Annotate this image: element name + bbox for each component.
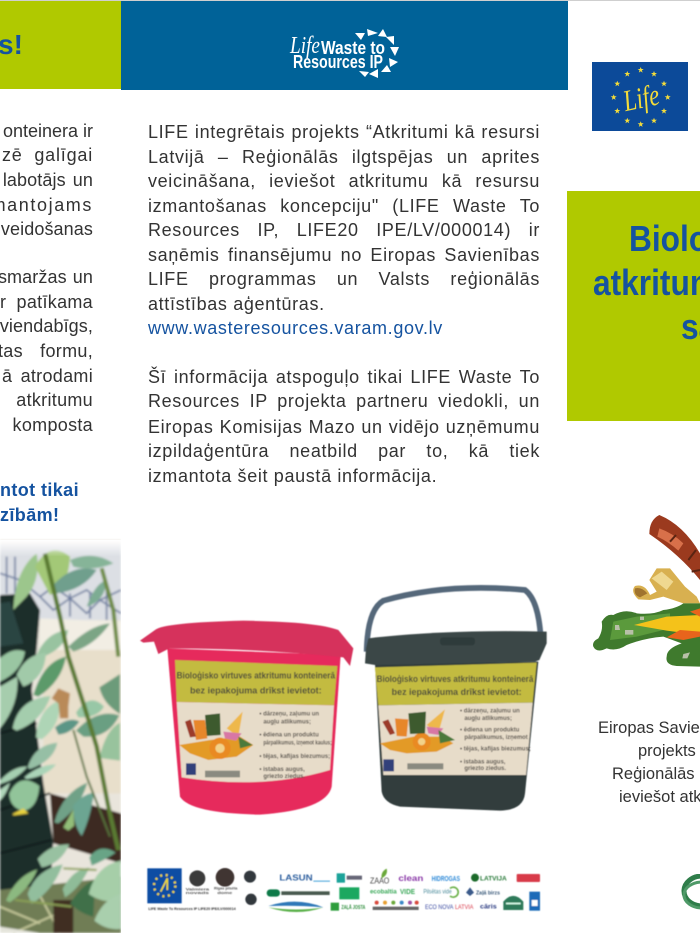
left column bold note: ntot tikai (0, 480, 79, 500)
dark container (365, 588, 547, 811)
partner logos strip: HIDROGAS (432, 874, 460, 883)
panel: green cover title (567, 191, 700, 421)
top edge line (0, 0, 700, 1)
partner logos strip: LATVIA (455, 904, 474, 911)
partner logos strip (146, 867, 541, 913)
dark container: griezto ziedus. (464, 766, 506, 772)
partner logos strip: cāris (480, 904, 497, 911)
icon: green ring logo (682, 874, 700, 910)
cover project text: projekts (638, 742, 696, 760)
dark container: • tējas, kafijas biezumus; (460, 747, 531, 753)
project description text: izmantošanas koncepciju" (LIFE Waste To (148, 196, 540, 216)
project description text: www.wasteresources.varam.gov.lv (148, 318, 443, 338)
logo: Life Waste to Resources IP: Life (289, 33, 320, 59)
logo: Life Waste to Resources IP: Waste to (321, 38, 385, 58)
dark container: • istabas augus, (460, 759, 506, 765)
partner logos strip: dome (217, 891, 232, 895)
LIFE EU logo (592, 62, 688, 131)
partner logos strip: ecobaltia (370, 888, 397, 895)
photo: food waste containers (140, 584, 548, 816)
disclaimer text: Eiropas Komisijas Mazo un vidējo uzņēmumu (148, 417, 540, 437)
disclaimer text: Šī informācija atspoguļo tikai LIFE Waste To (148, 367, 540, 387)
left column bold note: zībām! (0, 504, 59, 524)
logo: Life Waste to Resources IP (289, 29, 399, 78)
photo: rose bush beside compost bin (0, 539, 121, 933)
red container: • ēdiena un produktu (259, 733, 319, 739)
partner logos strip: Pilsētas vide (423, 889, 452, 895)
red container: • tējas, kafijas biezumus; (259, 754, 330, 760)
green header band with clipped title (0, 1, 121, 89)
partner logos strip: novads (186, 891, 209, 895)
left column clipped text: viendabīgs, (0, 316, 93, 336)
partner logos strip: VIDE (400, 887, 415, 896)
disclaimer text: izmantota šeit paustā informācija. (148, 466, 437, 486)
project description text: veicināšana, ieviešot atkritumu kā resursu (148, 171, 540, 191)
left column clipped text: veidošanas (1, 219, 93, 239)
project description text: saņēmis finansējumu no Eiropas Savienības (148, 245, 540, 265)
project description text: Latvijā – Reģionālās ilgtspējas un aprites (148, 147, 540, 167)
dark container: pārpalikumus, izņemot (464, 735, 528, 741)
red container: pārpalikumus, izņemot kaulus; (263, 740, 332, 746)
red container: Bioloģisko virtuves atkritumu konteinerā (177, 671, 336, 681)
partner logos strip: Valmiera (186, 888, 210, 892)
partner logos strip: ECO NOVA (425, 904, 454, 911)
dark container: • dārzeņu, zaļumu un (460, 708, 520, 714)
project description text: LIFE integrētais projekts “Atkritumi kā resursi (148, 122, 540, 142)
dark container: augļu atlikumus; (464, 716, 512, 722)
red container: • istabas augus, (259, 767, 305, 773)
left column clipped text: labotājs un (3, 170, 93, 190)
project description text (148, 122, 540, 338)
left column clipped text: r patīkama (0, 292, 93, 312)
project description text: Resources IP, LIFE20 IPE/LV/000014) ir (148, 220, 540, 240)
partner logos strip: LIFE Waste To Resources IP LIFE20 IPE/LV/000014 (148, 907, 237, 911)
partner logos strip: ZAAO (370, 876, 389, 885)
partner logos strip: ZAĻĀ JOSTA (341, 904, 365, 911)
illustration: food waste (593, 515, 700, 667)
left column clipped text: smaržas un (0, 267, 93, 287)
Life script: Life (619, 78, 662, 118)
red container: bez iepakojuma drīkst ievietot: (190, 685, 322, 695)
dark container: bez iepakojuma drīkst ievietot: (392, 687, 522, 697)
left column bold note (0, 480, 79, 524)
left column clipped text: komposta (13, 415, 93, 435)
left column clipped text: tas formu, (0, 341, 93, 361)
blue header band with project logo (121, 1, 568, 90)
disclaimer text: izpildaģentūra neatbild par to, kā tiek (148, 441, 540, 461)
partner logos strip: Rīgas pilsēta (214, 886, 238, 890)
cover project text (598, 719, 700, 806)
logo: Life Waste to Resources IP: Resources IP (293, 52, 383, 72)
red container (140, 621, 353, 815)
red container: augļu atlikumus; (263, 719, 311, 725)
partner logos strip: Zaļā birzs (476, 891, 500, 897)
project description text: LIFE programmas un Valsts reģionālās (148, 269, 540, 289)
partner logos strip: LATVIJA (480, 876, 507, 883)
left column clipped text: ā atrodami (2, 366, 93, 386)
red container: griezto ziedus. (263, 774, 305, 780)
red container: • dārzeņu, zaļumu un (259, 712, 319, 718)
left column clipped text: onteinera ir (3, 121, 93, 141)
project description text: attīstības aģentūras. (148, 294, 325, 314)
stars (611, 67, 671, 127)
disclaimer text (148, 366, 540, 486)
partner logos strip: LASUN (279, 874, 313, 883)
disclaimer text: Resources IP projekta partneru viedokli, un (148, 391, 540, 411)
left column clipped text: atkritumu (16, 390, 93, 410)
left column clipped text (0, 121, 93, 435)
dark container: Bioloģisko virtuves atkritumu konteinerā (377, 674, 534, 684)
dark container: • ēdiena un produktu (460, 728, 520, 734)
left column clipped text: zē galīgai (2, 145, 93, 165)
partner logos strip: clean (398, 874, 423, 883)
